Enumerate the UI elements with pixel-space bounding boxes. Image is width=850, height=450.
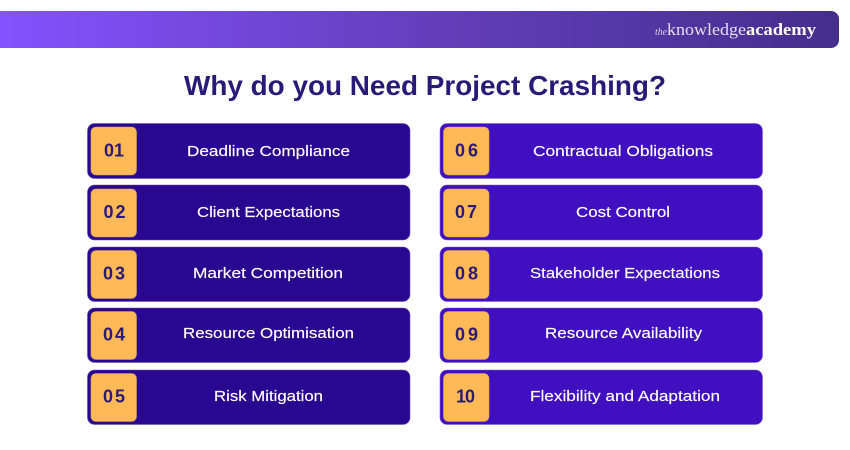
card 09: Resource Availability: Resource Availability (545, 325, 703, 342)
card 04: Resource Optimisation: Resource Optimisation (183, 325, 354, 342)
card 08: Stakeholder Expectations: 08 (455, 264, 478, 284)
card 06: Contractual Obligations: 06 (455, 140, 478, 160)
card 07: Cost Control: 07 (455, 202, 477, 222)
card 05: Risk Mitigation (88, 370, 410, 424)
title: Why do you Need Project Crashing? (184, 70, 666, 101)
card 05: Risk Mitigation: Risk Mitigation (214, 388, 323, 405)
card 02: Client Expectations: 02 (104, 202, 126, 222)
card 03: Market Competition: Market Competition (193, 265, 343, 282)
card 10: Flexibility and Adaptation: Flexibility and Adaptation (530, 388, 720, 405)
card 07: Cost Control: Cost Control (576, 204, 670, 221)
card 08: Stakeholder Expectations (440, 247, 762, 302)
logo: the knowledge academy: academy (746, 20, 817, 39)
card 06: Contractual Obligations (440, 124, 762, 178)
logo: the knowledge academy: the (655, 26, 667, 38)
card 04: Resource Optimisation (88, 308, 410, 362)
card 10: Flexibility and Adaptation: 10 (456, 386, 475, 406)
logo: the knowledge academy: knowledge (667, 20, 746, 39)
card 09: Resource Availability (440, 308, 762, 362)
card 01: Deadline Compliance (88, 124, 410, 178)
logo: the knowledge academy (655, 20, 817, 39)
card 03: Market Competition (88, 247, 410, 302)
card 08: Stakeholder Expectations: Stakeholder Expectations (530, 265, 720, 282)
card 02: Client Expectations: Client Expectations (197, 204, 340, 221)
card 07: Cost Control (440, 185, 762, 240)
card 03: Market Competition: 03 (103, 264, 125, 284)
card 01: Deadline Compliance: Deadline Compliance (187, 143, 350, 160)
card 10: Flexibility and Adaptation (440, 370, 762, 424)
card 02: Client Expectations (88, 185, 410, 240)
card 09: Resource Availability: 09 (455, 324, 478, 344)
card 06: Contractual Obligations: Contractual Obligations (533, 143, 713, 160)
card 05: Risk Mitigation: 05 (103, 386, 125, 406)
card 04: Resource Optimisation: 04 (103, 324, 125, 344)
header bar (0, 11, 839, 48)
card 01: Deadline Compliance: 01 (104, 140, 124, 160)
